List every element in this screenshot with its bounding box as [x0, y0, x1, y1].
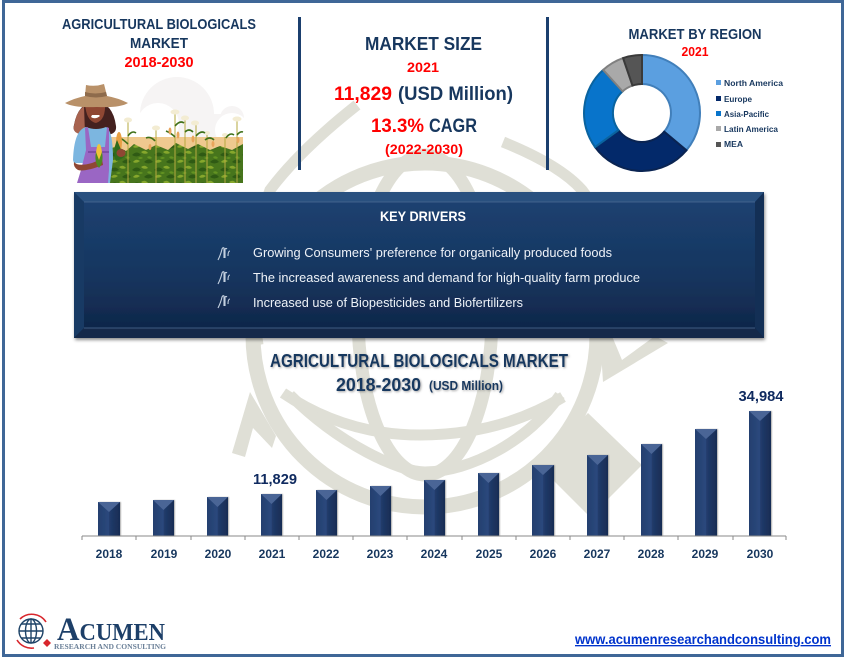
logo: Acumen: RESEARCH AND CONSULTING — [54, 643, 167, 651]
legend: regions: Asia-Pacific — [724, 109, 769, 119]
axis — [82, 536, 786, 540]
heading: market by region: 2021 — [682, 45, 709, 59]
heading: report title — [62, 16, 256, 71]
heading: bar chart title: (USD Million) — [429, 378, 503, 393]
legend: regions: North America — [724, 78, 783, 88]
market size block: (USD Million) — [398, 83, 513, 105]
illustration: farmer in corn field — [65, 77, 249, 183]
shirt and overalls — [73, 127, 113, 183]
value labels: 11,829 — [253, 471, 297, 488]
bar chart: market size 2018-2030 — [82, 388, 786, 561]
heading: bar chart title: 2018-2030 — [336, 374, 421, 395]
heading: report title: MARKET — [130, 35, 188, 52]
heading: bar chart title: AGRICULTURAL BIOLOGICALS MARKET — [270, 351, 568, 371]
driver list: Growing Consumers' preference for organically produced foods — [253, 245, 612, 260]
heading: bar chart title — [270, 351, 568, 395]
donut chart: market by region — [584, 55, 700, 171]
logo: Acumen — [17, 612, 167, 651]
year labels: 2029 — [692, 547, 719, 561]
stems and flower heads — [128, 113, 237, 183]
year labels: 2030 — [747, 547, 774, 561]
market size block: MARKET SIZE — [365, 33, 482, 54]
legend: regions: Latin America — [724, 124, 778, 134]
hair — [74, 101, 116, 135]
website link: www.acumenresearchandconsulting.com — [574, 632, 831, 647]
divider right — [546, 17, 549, 170]
year labels: 2023 — [367, 547, 394, 561]
divider left — [298, 17, 301, 170]
year labels: 2025 — [476, 547, 503, 561]
driver list: Increased use of Biopesticides and Biofertilizers — [253, 295, 523, 310]
value labels — [253, 388, 784, 488]
logo: Acumen: ACUMEN — [57, 612, 166, 648]
market size block: 11,829 — [334, 83, 392, 105]
clouds behind field — [140, 77, 244, 151]
year labels — [96, 547, 774, 561]
driver list: The increased awareness and demand for high-quality farm produce — [253, 270, 640, 285]
year labels: 2028 — [638, 547, 665, 561]
heading: report title: AGRICULTURAL BIOLOGICALS — [62, 16, 256, 33]
year labels: 2020 — [205, 547, 232, 561]
panel: key drivers — [74, 192, 764, 338]
hat — [65, 84, 128, 107]
year labels: 2019 — [151, 547, 178, 561]
year labels: 2022 — [313, 547, 340, 561]
market size block: 2021 — [407, 59, 439, 75]
year labels: 2027 — [584, 547, 611, 561]
legend: regions: MEA — [724, 139, 743, 149]
legend: regions: Europe — [724, 94, 752, 104]
face — [85, 103, 105, 123]
market size block: 13.3% — [371, 115, 424, 137]
legend: regions — [716, 78, 783, 149]
year labels: 2021 — [259, 547, 286, 561]
market size block: CAGR — [429, 115, 477, 137]
year labels: 2026 — [530, 547, 557, 561]
heading: market by region: MARKET BY REGION — [628, 26, 762, 43]
field — [108, 137, 243, 157]
market size block: (2022-2030) — [385, 141, 463, 157]
year labels: 2018 — [96, 547, 123, 561]
bar top bevels — [98, 411, 771, 512]
market size block — [334, 33, 513, 157]
watermark: globe logo — [232, 105, 668, 517]
heading: key drivers: KEY DRIVERS — [380, 208, 466, 224]
arm and corn — [74, 159, 103, 170]
year labels: 2024 — [421, 547, 448, 561]
heading: market by region — [628, 26, 762, 59]
heading: report title: 2018-2030 — [124, 54, 194, 71]
driver list — [218, 245, 640, 310]
value labels: 34,984 — [738, 388, 784, 405]
